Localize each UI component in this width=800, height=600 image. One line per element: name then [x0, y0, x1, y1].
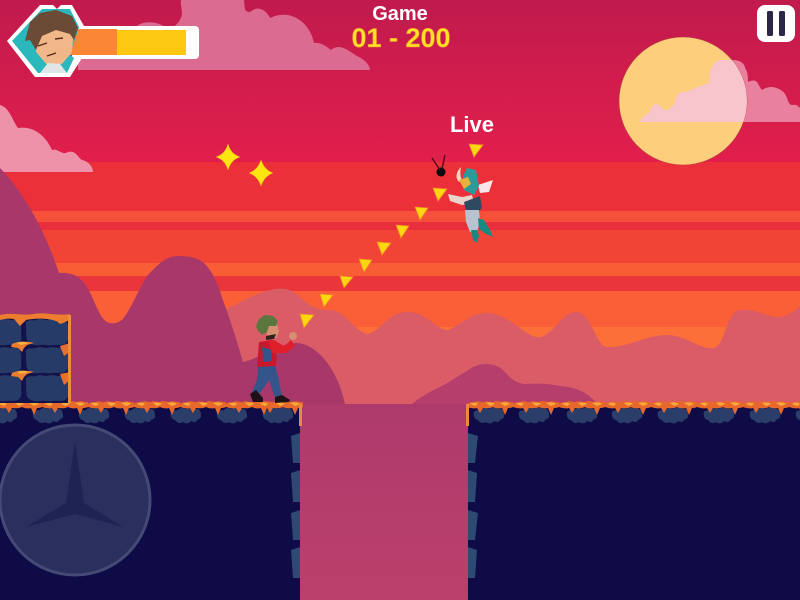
sparkles	[216, 144, 273, 186]
right ground platform	[466, 401, 800, 600]
side rocks	[468, 433, 478, 578]
torso	[257, 340, 277, 367]
fairy character	[448, 167, 493, 243]
cloud: top left	[0, 105, 93, 172]
legs	[252, 366, 282, 398]
cloud over sun	[640, 60, 747, 122]
cloud: top centre	[78, 0, 370, 70]
portrait frame	[7, 5, 84, 77]
body	[464, 196, 482, 212]
arm	[268, 340, 295, 353]
legs	[465, 210, 480, 232]
orange crust	[0, 401, 303, 415]
level title: Game	[372, 3, 428, 25]
stacked rock blocks	[0, 313, 71, 403]
far hills: light layer	[225, 289, 800, 420]
pause button	[757, 5, 795, 42]
live label: Live	[450, 112, 494, 137]
aiming trail	[300, 144, 483, 328]
sun	[619, 37, 747, 165]
boots	[471, 218, 493, 243]
wing	[478, 180, 493, 193]
head	[265, 324, 279, 339]
hair	[463, 168, 479, 195]
health bar	[68, 26, 199, 59]
hand	[289, 332, 297, 340]
orange crust	[467, 401, 800, 415]
player character	[250, 315, 297, 403]
hair	[256, 315, 278, 335]
player HUD	[7, 5, 199, 77]
stones	[0, 319, 68, 401]
cloud: right of sun	[640, 60, 800, 122]
joystick	[0, 425, 150, 575]
arms	[448, 194, 474, 205]
left ground platform	[0, 401, 303, 600]
side rocks	[291, 433, 300, 578]
near hills: magenta layer	[0, 168, 346, 410]
joystick star	[26, 441, 123, 527]
black bug	[432, 155, 446, 176]
horn	[457, 167, 462, 182]
score counter: 01 - 200	[351, 23, 451, 53]
rock row	[0, 408, 293, 423]
pit hump	[405, 364, 600, 410]
shoes	[250, 390, 290, 403]
background: sky	[0, 0, 800, 367]
portrait face	[25, 10, 78, 73]
rock row	[474, 408, 800, 423]
pit	[300, 404, 470, 600]
